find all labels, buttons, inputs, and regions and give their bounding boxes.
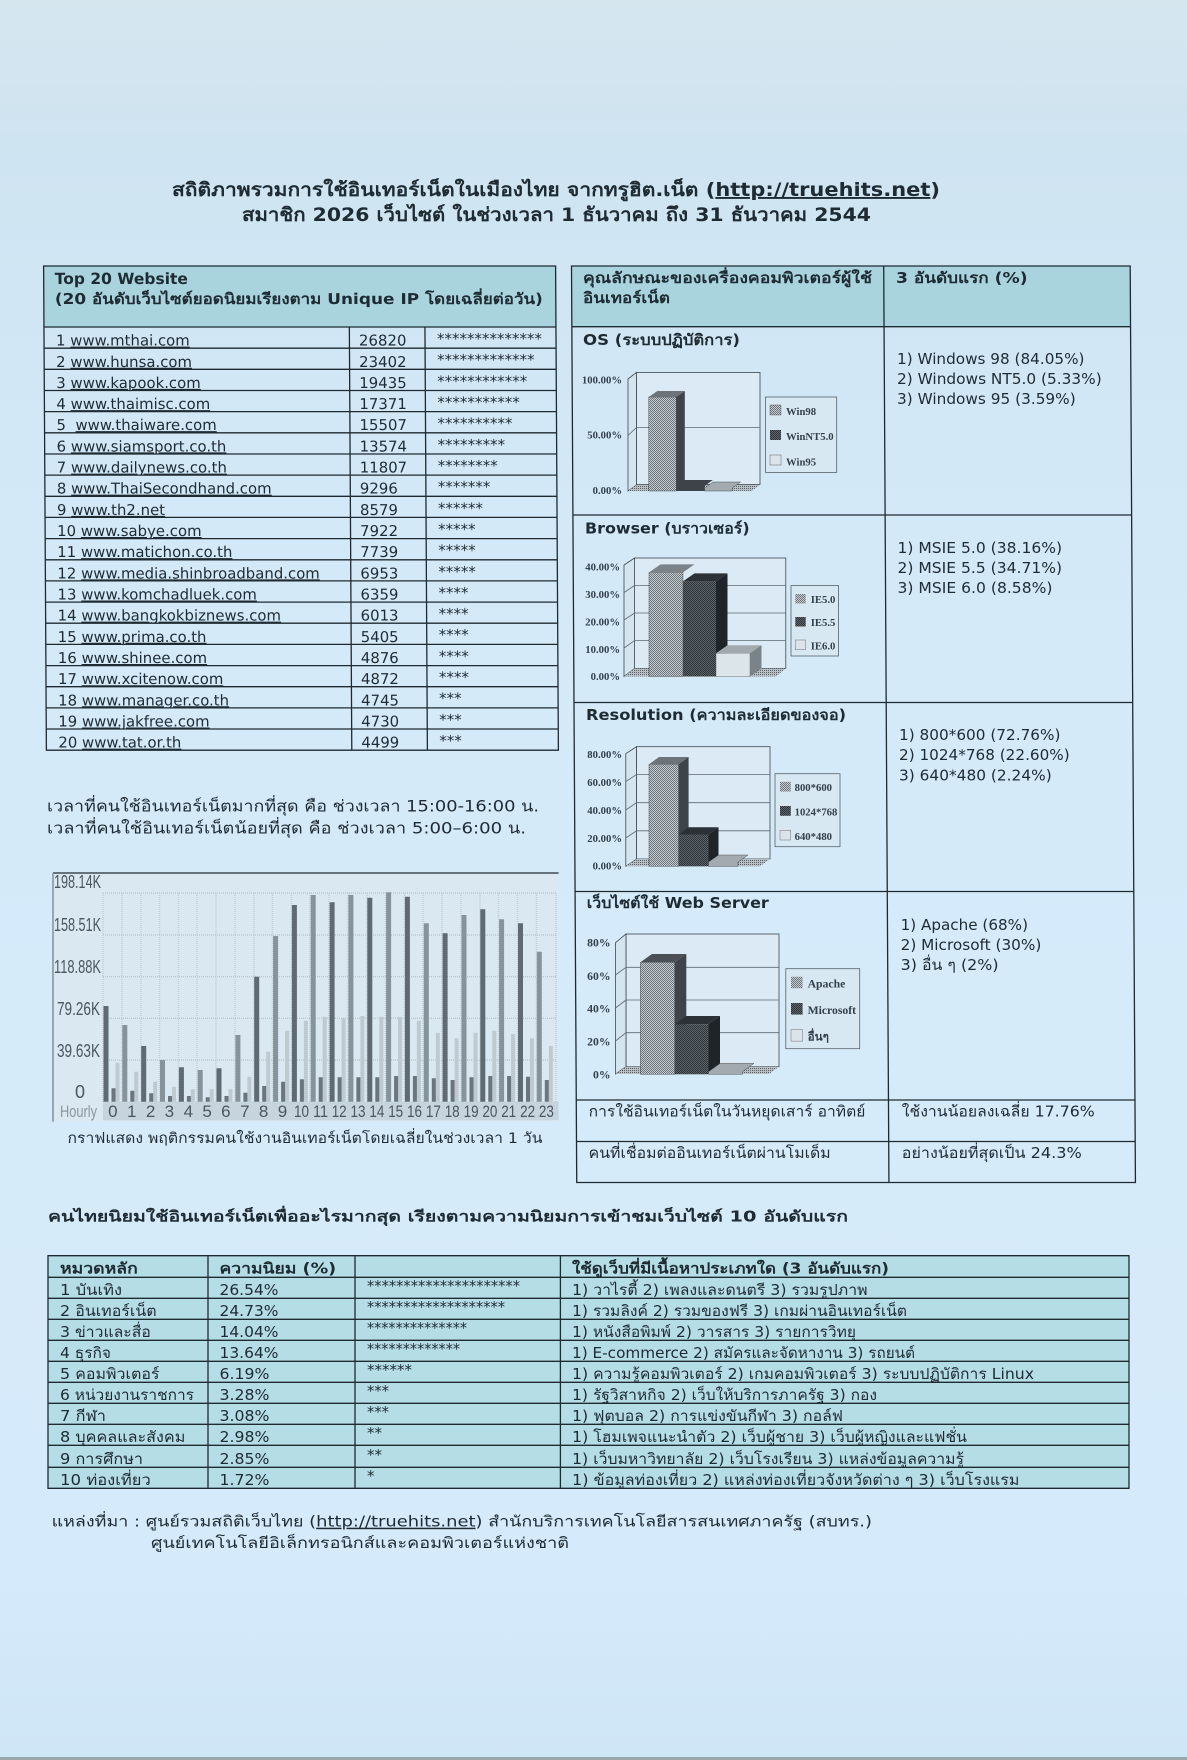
top 20 rows: **** [439,669,470,687]
title [172,177,940,226]
hourly x axis labels: Hourly [60,1102,97,1121]
categories rows: 1) หนังสือพิมพ์ 2) วารสาร 3) รายการวิทยุ [572,1323,856,1342]
chart: resolution: 0.00% [593,861,622,873]
top 20 rows: **** [439,626,469,644]
hourly y axis labels: 39.63K [57,1041,100,1061]
hourly x axis labels: 3 [165,1102,174,1121]
hourly bars: tall grey series [125,892,539,1102]
OS top three: 1) Windows 98 (84.05%) [897,350,1084,368]
categories header: ความนิยม (%) [220,1259,336,1277]
hourly x axis labels: 16 [407,1102,422,1121]
top 20 rows: 1 www.mthai.com [56,332,190,350]
categories rows: ************** [367,1319,467,1337]
hourly x axis labels: 4 [184,1102,193,1121]
chart: web server: 80% [587,937,610,950]
categories rows: 14.04% [220,1323,278,1341]
categories rows: 3 ข่าวและสื่อ [60,1321,151,1341]
top 20 rows: 15 www.prima.co.th [58,628,207,646]
modem usage row: คนที่เชื่อมต่ออินเทอร์เน็ตผ่านโมเด็ม [589,1142,831,1162]
top 20 rows: 9 www.th2.net [57,501,165,519]
top 20 rows: 4730 [361,713,399,730]
categories rows: 26.54% [220,1281,278,1299]
hourly x axis labels: 1 [127,1102,136,1121]
categories rows: 3.08% [220,1407,270,1425]
top 20 rows: ******* [438,478,491,496]
chart: resolution: 800*600 [795,782,832,794]
peak usage text: เวลาที่คนใช้อินเทอร์เน็ตมากที่สุด คือ ช่วงเวลา 15:00-16:00 น. [47,795,539,817]
characteristics header text [583,267,1028,307]
hourly x axis labels: 22 [520,1102,535,1121]
top 20 rows: 5405 [361,628,399,646]
hourly y axis labels: 79.26K [57,999,100,1019]
top 20 header: (20 อันดับเว็บไซต์ยอดนิยมเรียงตาม Unique IP โดยเฉลี่ยต่อวัน) [55,288,543,308]
top 20 rows: ****** [438,499,484,517]
chart: OS: Win98 [786,406,816,418]
chart: hourly usage [53,872,559,1122]
categories rows: 9 การศึกษา [60,1450,143,1468]
categories grid [48,1256,1129,1488]
chart: resolution: 20.00% [587,833,622,845]
top 20 rows: 17 www.xcitenow.com [58,670,223,688]
hourly bars: small series [114,1076,547,1102]
top 20 rows: *** [439,732,462,750]
web server heading: เว็บไซต์ใช้ Web Server [587,893,769,912]
top 20 header [44,266,556,327]
top 20 rows: 11 www.matichon.co.th [57,543,232,561]
chart: resolution: 640*480 [795,831,832,843]
hourly y axis labels: 158.51K [54,915,101,935]
categories rows: ********************* [367,1277,520,1295]
top 20 rows: 20 www.tat.or.th [58,734,181,752]
categories rows: 7 กีฬา [60,1407,106,1425]
chart: web server: Microsoft [808,1004,856,1017]
chart: browser: IE5.0 [811,594,835,606]
chart: browser: IE5.5 [811,617,835,629]
top 20 rows: 16 www.shinee.com [58,649,207,667]
top 20 rows: 7922 [360,522,398,540]
categories rows: 24.73% [220,1302,278,1320]
top 20 rows: **** [438,584,469,602]
chart: OS: 100.00% [582,374,622,386]
top 20 rows: 19 www.jakfree.com [58,713,210,730]
categories rows: 1) ฟุตบอล 2) การแข่งขันกีฬา 3) กอล์ฟ [572,1407,843,1426]
top 20 rows: 17371 [359,395,407,413]
top 20 rows: 23402 [359,353,407,371]
top 20 rows [56,330,545,752]
categories rows: 13.64% [220,1344,278,1362]
chart: resolution: 60.00% [587,777,622,789]
categories rows: 1 บันเทิง [60,1281,122,1299]
top 20 rows: 15507 [359,416,407,434]
chart: web server: 0% [593,1068,610,1081]
top 20 rows: 13574 [360,437,407,455]
chart: OS: 0.00% [593,485,622,497]
top 20 rows: 6953 [360,564,398,582]
hourly x axis labels [60,1102,554,1121]
hourly x axis labels: 15 [388,1102,403,1121]
top 20 rows: 5 www.thaiware.com [56,416,217,434]
chart: OS: WinNT5.0 [786,431,834,443]
categories rows: 1) รวมลิงค์ 2) รวมของฟรี 3) เกมผ่านอินเทอร์เน็ต [572,1301,907,1320]
hourly x axis labels: 21 [501,1102,516,1121]
hourly x axis labels: 23 [539,1102,554,1121]
hourly x axis labels: 10 [294,1102,309,1121]
chart: web server: 20% [587,1036,610,1049]
hourly x axis labels: 0 [108,1102,118,1121]
categories rows: ** [367,1446,382,1464]
top 20 grid [44,266,558,750]
categories rows: *** [367,1382,389,1400]
panel: categories table [48,1256,1129,1489]
categories rows: 1) E-commerce 2) สมัครและจัดหางาน 3) รถยนต์ [572,1344,915,1362]
hourly x axis labels: 14 [369,1102,384,1121]
peak usage text [47,795,539,838]
hourly x axis labels: 13 [350,1102,366,1121]
categories rows: 6 หน่วยงานราชการ [60,1386,194,1404]
chart: resolution: 80.00% [587,749,622,761]
categories rows: 10 ท่องเที่ยว [60,1469,151,1489]
modem usage row [589,1142,1082,1163]
top 20 rows: 4 www.thaimisc.com [56,395,210,413]
top 20 rows: ************* [437,351,535,369]
hourly x axis labels: 17 [426,1102,441,1121]
chart: browser: 10.00% [585,644,620,656]
chart: browser: 20.00% [585,616,620,628]
hourly x axis labels: 19 [464,1102,479,1121]
hourly x axis labels: 9 [278,1102,287,1121]
browser top three: 3) MSIE 6.0 (8.58%) [898,579,1052,597]
hourly x axis labels: 7 [240,1102,250,1121]
resolution top three: 3) 640*480 (2.24%) [899,766,1052,784]
chart: web server: Apache [808,978,845,991]
chart: OS [582,372,837,497]
top 20 rows: 2 www.hunsa.com [56,353,192,371]
top 20 rows: 6013 [361,607,399,625]
browser heading: Browser (บราวเซอร์) [585,520,750,538]
web server top three: 1) Apache (68%) [901,916,1028,934]
hourly x axis labels: 8 [259,1102,268,1121]
title: สถิติภาพรวมการใช้อินเทอร์เน็ตในเมืองไทย จากทรูฮิต.เน็ต ( http://truehits.net ) [172,177,940,202]
resolution top three: 1) 800*600 (72.76%) [899,726,1060,744]
top 20 rows: 3 www.kapook.com [56,374,201,392]
categories rows: 6.19% [220,1365,270,1383]
source note: ศูนย์เทคโนโลยีอิเล็กทรอนิกส์และคอมพิวเตอร์แห่งชาติ [151,1533,569,1552]
hourly x axis labels: 6 [221,1102,231,1121]
top 20 rows: 4499 [361,734,399,752]
categories rows: 2 อินเทอร์เน็ต [60,1301,157,1320]
categories header: ใช้ดูเว็บที่มีเนื้อหาประเภทใด (3 อันดับแรก) [572,1256,889,1278]
top 20 rows: 4876 [361,649,399,667]
categories rows: 1) ข้อมูลท่องเที่ยว 2) แหล่งท่องเที่ยวจังหวัดต่าง ๆ 3) เว็บโรงแรม [572,1469,1020,1489]
hourly x axis labels: 20 [482,1102,497,1121]
top 20 rows: 9296 [360,480,398,498]
top 20 rows: 13 www.komchadluek.com [57,586,257,603]
top 20 rows: 11807 [360,459,407,477]
top 20 rows: 7 www.dailynews.co.th [57,459,227,477]
chart: resolution: 40.00% [587,805,622,817]
hourly x axis labels: 11 [313,1102,328,1121]
chart: resolution [587,747,840,873]
top 20 rows: *********** [437,394,520,411]
categories rows: 8 บุคคลและสังคม [60,1428,185,1447]
weekend usage row [589,1101,1095,1122]
categories rows: ************* [367,1340,460,1358]
hourly y axis labels: 0 [75,1082,85,1102]
hourly x axis labels: 12 [332,1102,347,1121]
categories rows: 2.98% [220,1428,270,1446]
panel: computer characteristics table [572,266,1135,1182]
categories rows: *** [367,1403,389,1421]
categories rows: 1) รัฐวิสาหกิจ 2) เว็บให้บริการภาครัฐ 3) กอง [572,1385,877,1404]
chart caption: กราฟแสดง พฤติกรรมคนใช้งานอินเทอร์เน็ตโดยเฉลี่ยในช่วงเวลา 1 วัน [68,1128,543,1147]
hourly y axis labels: 118.88K [54,957,101,977]
categories rows: ****** [367,1361,412,1379]
chart: OS: Win95 [786,456,816,468]
panel: top 20 website table [44,266,558,752]
OS top three: 2) Windows NT5.0 (5.33%) [897,370,1102,388]
categories header: หมวดหลัก [60,1259,138,1277]
chart: web server: 40% [587,1003,610,1016]
chart: browser: 30.00% [585,589,620,601]
resolution heading: Resolution (ความละเอียดของจอ) [586,706,846,724]
categories rows: ** [367,1424,382,1442]
categories rows [60,1277,1034,1489]
top 20 rows: 4872 [361,670,399,688]
hourly bars: tall dark series [106,897,520,1102]
categories heading: คนไทยนิยมใช้อินเทอร์เน็ตเพื่ออะไรมากสุด เรียงตามความนิยมการเข้าชมเว็บไซต์ 10 อันดับแรก [48,1206,848,1227]
top 20 rows: 12 www.media.shinbroadband.com [57,564,320,582]
browser top three: 1) MSIE 5.0 (38.16%) [898,539,1062,557]
top 20 rows: **** [439,647,469,665]
categories rows: 1) เว็บมหาวิทยาลัย 2) เว็บโรงเรียน 3) แหล่งข้อมูลความรู้ [572,1449,964,1468]
title: สมาชิก 2026 เว็บไซต์ ในช่วงเวลา 1 ธันวาคม ถึง 31 ธันวาคม 2544 [242,202,871,226]
top 20 rows: ************** [437,330,543,348]
hourly x axis labels: 2 [146,1102,155,1121]
characteristics header text: อินเทอร์เน็ต [583,288,670,307]
top 20 header: Top 20 Website [55,270,188,288]
hourly x axis labels: 5 [202,1102,212,1121]
source note: แหล่งที่มา : ศูนย์รวมสถิติเว็บไทย ( http://truehits.net ) สำนักบริการเทคโนโลยีสารสนเทศภาครัฐ (สบทร.) [52,1511,872,1531]
top 20 rows: 26820 [359,332,406,350]
characteristics header fill [572,266,1130,327]
categories rows: ******************* [367,1298,505,1316]
top 20 rows: ***** [438,520,476,538]
characteristics header text: 3 อันดับแรก (%) [896,269,1028,287]
categories rows: * [367,1467,375,1485]
chart: web server: อื่นๆ [808,1028,829,1044]
categories rows: 1.72% [220,1471,270,1489]
top 20 rows: 6359 [360,586,398,603]
hourly y axis labels [54,872,101,1102]
OS top three [897,350,1102,408]
top 20 rows: **** [439,605,469,623]
categories rows: 3.28% [220,1386,270,1404]
peak usage text: เวลาที่คนใช้อินเทอร์เน็ตน้อยที่สุด คือ ช่วงเวลา 5:00–6:00 น. [47,816,526,838]
chart: resolution: 1024*768 [795,806,837,818]
modem usage row: อย่างน้อยที่สุดเป็น 24.3% [902,1142,1082,1163]
chart: web server [587,934,860,1081]
top 20 rows: 6 www.siamsport.co.th [57,437,226,455]
hourly y axis labels: 198.14K [54,872,101,892]
categories header [60,1256,889,1278]
top 20 rows: 8 www.ThaiSecondhand.com [57,480,272,498]
top 20 rows: ***** [438,563,476,581]
weekend usage row: การใช้อินเทอร์เน็ตในวันหยุดเสาร์ อาทิตย์ [589,1102,865,1122]
web server top three: 3) อื่น ๆ (2%) [901,954,999,974]
source note [52,1511,872,1552]
hourly x axis labels: 18 [445,1102,460,1121]
categories rows: 1) โฮมเพจแนะนำตัว 2) เว็บผู้ชาย 3) เว็บผู้หญิงและแฟชั่น [572,1426,967,1446]
characteristics grid [572,266,1135,1182]
top 20 rows: *** [439,690,462,708]
chart: browser: 40.00% [585,561,620,573]
top 20 rows: 18 www.manager.co.th [58,691,229,709]
top 20 rows: 8579 [360,501,398,519]
top 20 rows: 10 www.sabye.com [57,522,202,540]
resolution top three [899,726,1070,784]
top 20 rows: ******** [438,457,498,475]
web server top three [901,916,1041,974]
categories rows: 1) ความรู้คอมพิวเตอร์ 2) เกมคอมพิวเตอร์ 3) ระบบปฏิบัติการ Linux [572,1365,1034,1383]
top 20 rows: 7739 [360,543,398,561]
top 20 rows: *** [439,711,462,729]
categories rows: 5 คอมพิวเตอร์ [60,1365,160,1383]
chart: browser [585,558,839,683]
top 20 rows: 14 www.bangkokbiznews.com [58,607,281,625]
categories rows: 4 ธุรกิจ [60,1344,111,1363]
OS top three: 3) Windows 95 (3.59%) [897,390,1076,408]
categories rows: 2.85% [220,1450,270,1468]
weekend usage row: ใช้งานน้อยลงเฉลี่ย 17.76% [902,1101,1095,1121]
top 20 rows: ************ [437,372,528,390]
OS heading: OS (ระบบปฏิบัติการ) [583,331,740,349]
top 20 rows: 19435 [359,374,407,392]
chart: web server: 60% [587,970,610,983]
chart: browser: 0.00% [591,671,620,683]
browser top three [898,539,1062,597]
web server top three: 2) Microsoft (30%) [901,936,1041,954]
hourly bars: light series [118,1016,551,1102]
top 20 rows: ********* [438,436,506,454]
resolution top three: 2) 1024*768 (22.60%) [899,746,1070,764]
categories rows: 1) วาไรตี้ 2) เพลงและดนตรี 3) รวมรูปภาพ [572,1279,868,1299]
characteristics header text: คุณลักษณะของเครื่องคอมพิวเตอร์ผู้ใช้ [583,267,872,288]
browser top three: 2) MSIE 5.5 (34.71%) [898,559,1062,577]
top 20 rows: ********** [437,415,513,433]
top 20 rows: ***** [438,542,476,560]
top 20 rows: 4745 [361,691,399,709]
chart: OS: 50.00% [587,430,622,442]
chart: browser: IE6.0 [811,641,835,653]
